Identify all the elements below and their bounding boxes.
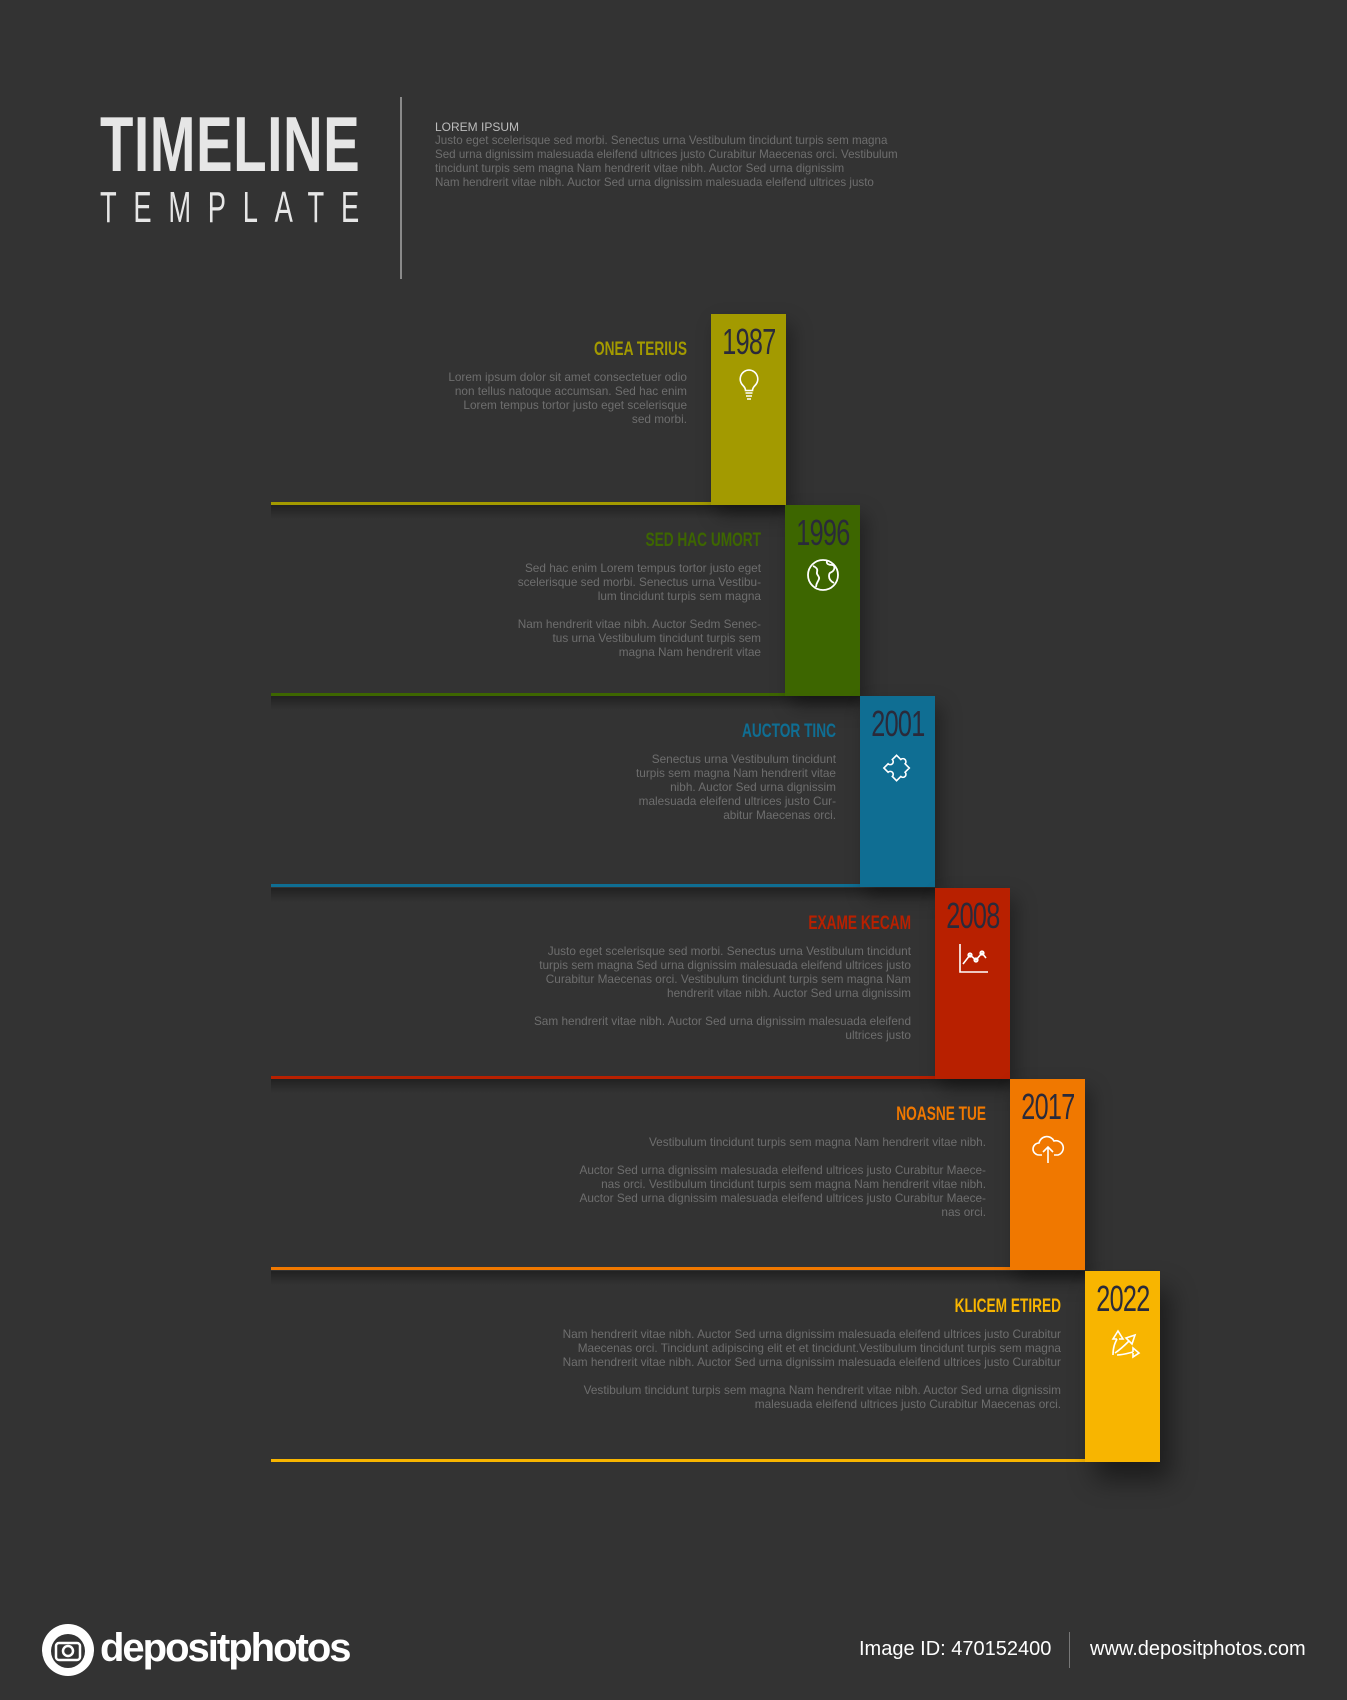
- footer: url: www.depositphotos.com: [1090, 1638, 1306, 1660]
- text 1996: scelerisque sed morbi. Senectus urna Vestibu-: [518, 575, 761, 589]
- text 2017: Auctor Sed urna dignissim malesuada eleifend ultrices justo Curabitur Maece-: [579, 1191, 986, 1205]
- text 2022: KLICEM ETIRED: [955, 1296, 1061, 1317]
- text 2001: [636, 721, 836, 822]
- bar 1996: 1996: [796, 512, 850, 553]
- text 2008: Curabitur Maecenas orci. Vestibulum tincidunt turpis sem magna Nam: [546, 972, 911, 986]
- text 2008: EXAME KECAM: [808, 913, 911, 934]
- text 1987: Lorem ipsum dolor sit amet consectetuer odio: [448, 370, 687, 384]
- step 2022: [271, 1271, 1175, 1485]
- title: [100, 100, 376, 232]
- text 1996: magna Nam hendrerit vitae: [619, 645, 761, 659]
- intro text: Nam hendrerit vitae nibh. Auctor Sed urna dignissim malesuada eleifend ultrices justo: [435, 176, 874, 189]
- intro text: [435, 120, 898, 189]
- text 2001: Senectus urna Vestibulum tincidunt: [652, 752, 836, 766]
- footer: logo: [42, 1624, 350, 1676]
- bar 2008: 2008: [946, 895, 1000, 936]
- bar 1987: [711, 314, 786, 505]
- text 1996: lum tincidunt turpis sem magna: [598, 589, 761, 603]
- text 2022: Vestibulum tincidunt turpis sem magna Nam hendrerit vitae nibh. Auctor Sed urna dignissim: [584, 1383, 1061, 1397]
- icon: bulb: [739, 369, 759, 400]
- text 1996: Nam hendrerit vitae nibh. Auctor Sedm Senec-: [518, 617, 761, 631]
- icon: chart: [959, 944, 988, 973]
- bar 2022: 2022: [1096, 1278, 1150, 1319]
- text 1996: [518, 530, 761, 659]
- intro text: Sed urna dignissim malesuada eleifend ultrices justo Curabitur Maecenas orci. Vestibulum: [435, 148, 898, 161]
- text 2022: [563, 1296, 1061, 1411]
- footer: image id: Image ID: 470152400: [859, 1638, 1051, 1660]
- step 2017: [271, 1079, 1092, 1280]
- step 2001: [271, 696, 942, 896]
- text 2001: AUCTOR TINC: [742, 721, 836, 742]
- icon: cloud upload: [1032, 1136, 1064, 1163]
- text 2001: nibh. Auctor Sed urna dignissim: [670, 780, 836, 794]
- intro text: Justo eget scelerisque sed morbi. Senectus urna Vestibulum tincidunt turpis sem magna: [435, 134, 887, 147]
- step 1996: [271, 505, 867, 706]
- text 2022: Nam hendrerit vitae nibh. Auctor Sed urna dignissim malesuada eleifend ultrices justo Curabitur: [563, 1327, 1061, 1341]
- text 2008: [534, 913, 911, 1042]
- text 2017: nas orci. Vestibulum tincidunt turpis sem magna Nam hendrerit vitae nibh.: [601, 1177, 986, 1191]
- text 1987: Lorem tempus tortor justo eget scelerisque: [463, 398, 687, 412]
- text 2008: hendrerit vitae nibh. Auctor Sed urna dignissim: [667, 986, 911, 1000]
- bar 2001: 2001: [871, 703, 925, 744]
- step 1987: [271, 314, 793, 516]
- bar 1996: [785, 505, 860, 696]
- bar 2022: [1085, 1271, 1160, 1462]
- divider line: [400, 97, 402, 279]
- text 2017: nas orci.: [941, 1205, 986, 1219]
- bar 2008: [935, 888, 1010, 1079]
- text 2008: Sam hendrerit vitae nibh. Auctor Sed urna dignissim malesuada eleifend: [534, 1014, 911, 1028]
- bar 2017: [1010, 1079, 1085, 1270]
- text 1996: Sed hac enim Lorem tempus tortor justo eget: [525, 561, 761, 575]
- text 2017: Auctor Sed urna dignissim malesuada eleifend ultrices justo Curabitur Maece-: [579, 1163, 986, 1177]
- text 2022: malesuada eleifend ultrices justo Curabitur Maecenas orci.: [755, 1397, 1061, 1411]
- text 1987: ONEA TERIUS: [594, 339, 687, 360]
- text 2017: NOASNE TUE: [896, 1104, 986, 1125]
- icon: puzzle: [882, 754, 910, 782]
- bar 1987: 1987: [722, 321, 776, 362]
- text 1996: tus urna Vestibulum tincidunt turpis sem: [552, 631, 761, 645]
- text 2008: ultrices justo: [845, 1028, 911, 1042]
- icon: globe: [807, 559, 839, 591]
- title: TEMPLATE: [100, 183, 376, 232]
- text 1987: [448, 339, 687, 426]
- text 2001: turpis sem magna Nam hendrerit vitae: [636, 766, 836, 780]
- icon: arrows: [1112, 1330, 1140, 1358]
- text 2017: Vestibulum tincidunt turpis sem magna Nam hendrerit vitae nibh.: [649, 1135, 986, 1149]
- bar 2001: [860, 696, 935, 887]
- intro text: tincidunt turpis sem magna Nam hendrerit vitae nibh. Auctor Sed urna dignissim: [435, 162, 844, 175]
- text 2022: Nam hendrerit vitae nibh. Auctor Sed urna dignissim malesuada eleifend ultrices justo Curabitur: [563, 1355, 1061, 1369]
- intro text: LOREM IPSUM: [435, 120, 519, 134]
- footer: logo: depositphotos: [100, 1626, 350, 1670]
- text 1996: SED HAC UMORT: [645, 530, 761, 551]
- text 1987: non tellus natoque accumsan. Sed hac enim: [455, 384, 687, 398]
- text 2008: turpis sem magna Sed urna dignissim malesuada eleifend ultrices justo: [539, 958, 911, 972]
- text 2017: [579, 1104, 986, 1219]
- text 2022: Maecenas orci. Tincidunt adipiscing elit et et tincidunt.Vestibulum tincidunt turpis sem magna: [578, 1341, 1061, 1355]
- text 2001: malesuada eleifend ultrices justo Cur-: [639, 794, 836, 808]
- text 1987: sed morbi.: [632, 412, 687, 426]
- step 2008: [271, 888, 1017, 1090]
- footer divider: [1069, 1632, 1070, 1668]
- text 2001: abitur Maecenas orci.: [723, 808, 836, 822]
- title: TIMELINE: [100, 100, 360, 188]
- bar 2017: 2017: [1021, 1086, 1075, 1127]
- text 2008: Justo eget scelerisque sed morbi. Senectus urna Vestibulum tincidunt: [548, 944, 911, 958]
